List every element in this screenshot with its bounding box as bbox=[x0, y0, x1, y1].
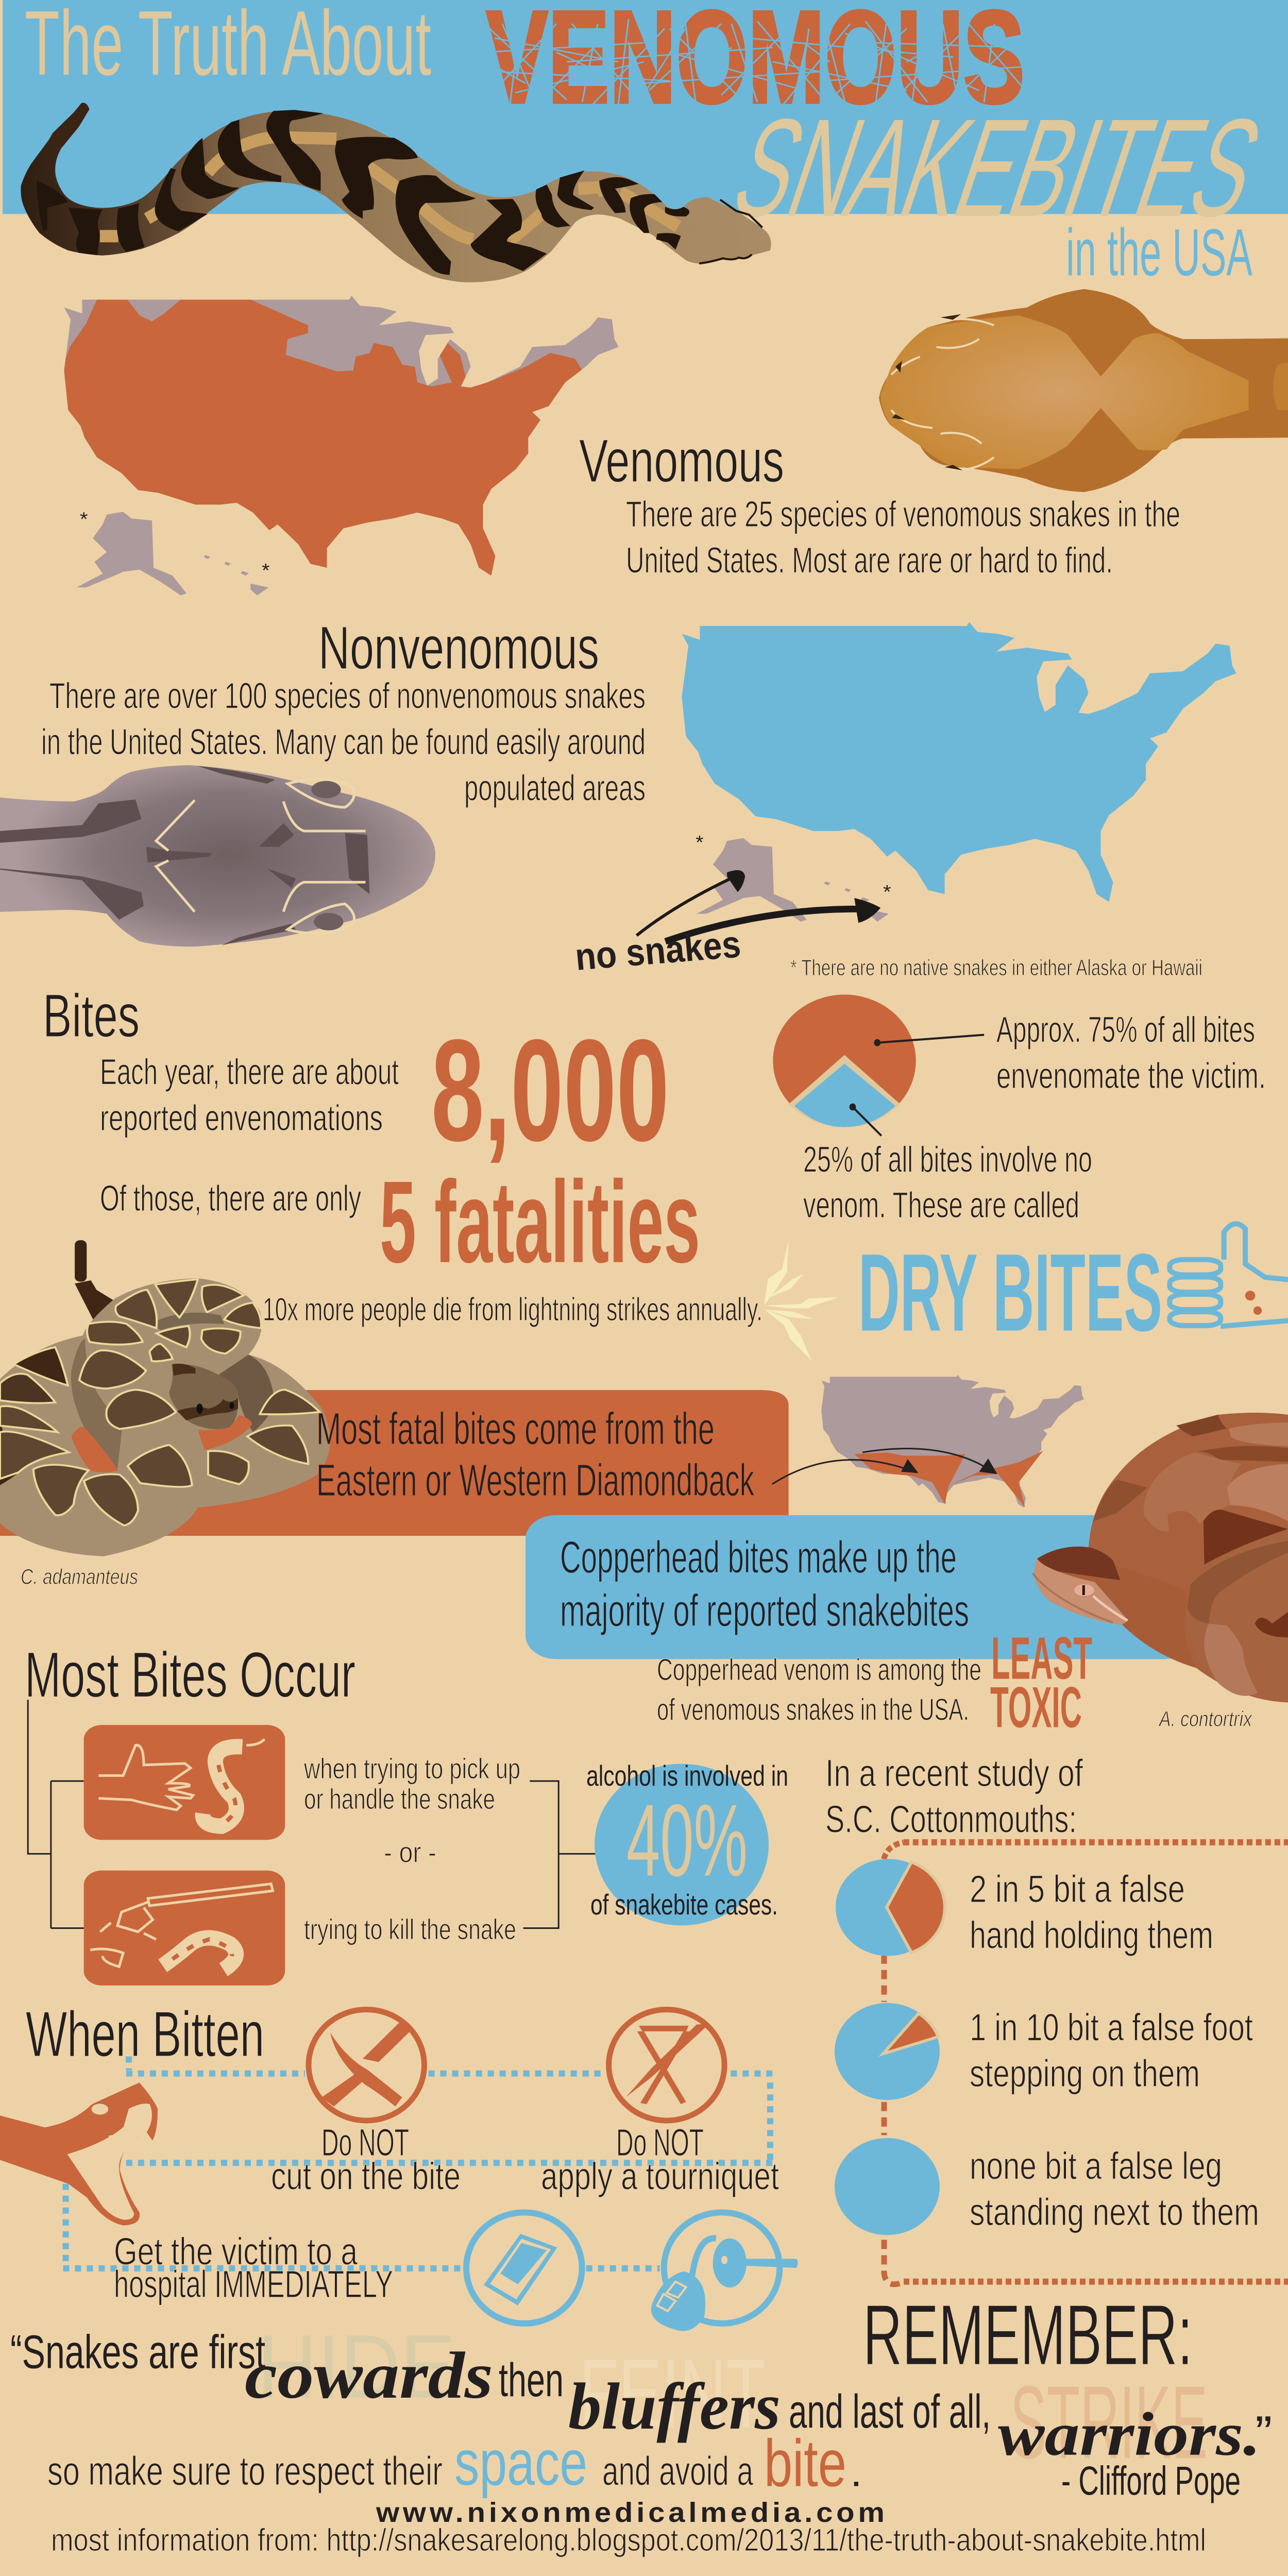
US outline blue bbox=[682, 622, 1236, 902]
icon: lightning bolts bbox=[764, 1241, 839, 1361]
word: LEAST TOXIC bbox=[990, 1624, 1092, 1739]
text: diamondback callout: Eastern or Western Diamondback bbox=[316, 1455, 754, 1505]
text: bite causes: trying to kill the snake bbox=[304, 1914, 516, 1946]
icon: nonvenomous snake head, top view bbox=[0, 765, 435, 946]
Alaska and Hawaii gray bbox=[697, 838, 889, 922]
snake body bbox=[21, 106, 771, 282]
quote: Clifford Pope: “Snakes are first bbox=[10, 2326, 265, 2379]
tan stripes bbox=[100, 137, 678, 241]
top rattlesnake illustration bbox=[21, 103, 771, 282]
text: study results bbox=[970, 1868, 1259, 2233]
asterisks on nonvenomous map bbox=[696, 832, 891, 903]
text: hospital bbox=[114, 2230, 393, 2306]
icon: copperhead snake bbox=[1032, 1413, 1288, 1702]
venomous range orange bbox=[49, 300, 590, 584]
map: diamondback range bbox=[772, 1375, 1084, 1507]
text: diamondback callout bbox=[316, 1404, 754, 1505]
panel: diamondback callout bbox=[0, 1390, 789, 1536]
dotted bracket: cottonmouth section bbox=[884, 1842, 1288, 2284]
icon: do not cut bbox=[309, 2010, 424, 2121]
text: respect space, avoid a bite: . bbox=[850, 2450, 862, 2495]
asterisks on venomous map: * bbox=[262, 560, 270, 581]
quote: Clifford Pope bbox=[10, 2326, 1272, 2503]
pie: none leg bbox=[835, 2138, 940, 2235]
heading: Most Bites Occur: Most Bites Occur bbox=[25, 1638, 355, 1710]
text: bite causes: when trying to pick up bbox=[303, 1753, 520, 1785]
caption: A. contortrix: A. contortrix bbox=[1158, 1707, 1252, 1731]
copperhead body bbox=[1089, 1413, 1288, 1702]
text: pie labels: venom. These are called bbox=[803, 1185, 1079, 1225]
text: hospital: hospital IMMEDIATELY bbox=[114, 2263, 393, 2306]
rattle bbox=[47, 103, 89, 147]
quote: Clifford Pope: and last of all, bbox=[789, 2385, 991, 2438]
heading: Venomous: Venomous bbox=[579, 427, 784, 495]
panel: copperhead callout bbox=[526, 1515, 1195, 1659]
dotted path: when bitten steps bbox=[63, 2056, 773, 2268]
stat: 8,000 envenomations: Each year, there are about bbox=[100, 1052, 399, 1092]
header band bbox=[0, 0, 1288, 214]
text: LEAST bbox=[991, 1624, 1092, 1691]
map: venomous range bbox=[49, 296, 619, 596]
quote: background words bbox=[257, 2316, 1208, 2480]
diamondback range orange and arrows bbox=[772, 1449, 1043, 1507]
icon: thumbs up hand bbox=[1170, 1224, 1288, 1326]
stat: 8,000 envenomations bbox=[100, 1009, 669, 1172]
pie chart: 75% envenomate, 25% dry bbox=[773, 995, 984, 1136]
text: do not cut: cut on the bite bbox=[271, 2155, 461, 2198]
text: study results: 2 in 5 bit a false bbox=[970, 1868, 1185, 1910]
text: nonvenomous description: in the United States. Many can be found easily around bbox=[41, 722, 646, 762]
pie charts: false limb study bbox=[835, 1859, 945, 2235]
text: pie labels: 25% of all bites involve no bbox=[803, 1140, 1092, 1180]
icon: coiled diamondback rattlesnake bbox=[0, 1240, 330, 1556]
asterisks on nonvenomous map: * bbox=[883, 882, 891, 903]
icon: stick and snake panel bbox=[84, 1871, 285, 1986]
icon: phone bbox=[466, 2212, 582, 2324]
rattle and tail bbox=[75, 1240, 114, 1319]
quote: Clifford Pope: ” bbox=[1255, 2406, 1272, 2460]
icon: do not apply tourniquet bbox=[609, 2010, 724, 2121]
stat: 40% alcohol: alcohol is involved in bbox=[586, 1760, 788, 1792]
text: cottonmouth study heading: S.C. Cottonmouths: bbox=[825, 1798, 1077, 1841]
text: respect space, avoid a bite: space bbox=[454, 2427, 587, 2499]
icon: hospital pager and stethoscope bbox=[651, 2212, 798, 2331]
caption: C. adamanteus: C. adamanteus bbox=[21, 1565, 138, 1589]
text: do not cut: Do NOT bbox=[321, 2122, 409, 2164]
title word: VENOMOUS scratched bbox=[484, 0, 1025, 130]
label: no snakes: no snakes bbox=[573, 923, 742, 978]
pie: 2 in 5 hand bbox=[836, 1859, 945, 1956]
icon: hand and snake panel bbox=[84, 1725, 285, 1840]
map: nonvenomous range bbox=[637, 622, 1236, 941]
text: study results: stepping on them bbox=[970, 2053, 1200, 2095]
text: copperhead callout bbox=[560, 1532, 969, 1636]
text: nonvenomous description: There are over 100 species of nonvenomous snakes bbox=[49, 676, 646, 716]
text: do not tourniquet bbox=[541, 2122, 779, 2198]
text: venomous description bbox=[626, 494, 1180, 581]
text: least toxic note: of venomous snakes in the USA. bbox=[657, 1693, 969, 1727]
text: bite causes: or handle the snake bbox=[304, 1784, 495, 1816]
text: respect space, avoid a bite: bite bbox=[764, 2426, 846, 2500]
text: hospital: Get the victim to a bbox=[114, 2230, 358, 2273]
stat: 40% alcohol: 40% bbox=[626, 1783, 748, 1897]
US outline gray bbox=[64, 296, 619, 575]
text: diamondback callout: Most fatal bites come from the bbox=[316, 1404, 715, 1454]
lightning text: 10x more people die from lightning strikes annually. bbox=[263, 1292, 762, 1328]
asterisks on venomous map: * bbox=[80, 509, 88, 530]
text: respect space, avoid a bite: so make sure to respect their bbox=[47, 2449, 443, 2494]
text: copperhead callout: majority of reported snakebites bbox=[560, 1585, 969, 1636]
text: copperhead callout: Copperhead bites make up the bbox=[560, 1532, 957, 1583]
text: nonvenomous description: populated areas bbox=[464, 768, 646, 808]
quote: Clifford Pope: warriors. bbox=[998, 2400, 1261, 2468]
text: do not tourniquet: Do NOT bbox=[616, 2122, 704, 2164]
icon: open-mouth snake bbox=[0, 2082, 158, 2225]
text: bite causes bbox=[303, 1753, 520, 1946]
dark blotches bbox=[37, 110, 689, 275]
word: LEAST TOXIC: TOXIC bbox=[990, 1675, 1082, 1739]
text: nonvenomous description bbox=[41, 676, 646, 808]
stat: 40% alcohol: of snakebite cases. bbox=[590, 1889, 778, 1921]
quote: Clifford Pope: bluffers bbox=[568, 2370, 781, 2444]
arrow: to Hawaii bbox=[665, 898, 880, 941]
stat: 5 fatalities bbox=[100, 1157, 700, 1287]
stat: 40% alcohol bbox=[586, 1760, 788, 1925]
heading: Nonvenomous: Nonvenomous bbox=[318, 614, 599, 682]
text: bite causes: - or - bbox=[384, 1837, 436, 1869]
quote: background words: FEINT bbox=[579, 2338, 766, 2448]
website: www.nixonmedicalmedia.com bbox=[376, 2497, 885, 2528]
text: pie labels bbox=[803, 1010, 1266, 1225]
icon: copperhead head, top view bbox=[879, 289, 1288, 492]
quote: Clifford Pope: then bbox=[499, 2354, 564, 2406]
stat: 5 fatalities: 5 fatalities bbox=[380, 1157, 700, 1287]
small US map gray bbox=[821, 1375, 1084, 1507]
text: respect space, avoid a bite: and avoid a bbox=[602, 2449, 753, 2494]
asterisks on nonvenomous map: * bbox=[696, 832, 704, 853]
coiled body bbox=[0, 1278, 330, 1556]
text: respect space, avoid a bite bbox=[47, 2426, 862, 2500]
connector lines bbox=[28, 1700, 596, 1928]
arrow: to Alaska bbox=[637, 870, 745, 936]
text: least toxic note: Copperhead venom is among the bbox=[657, 1653, 981, 1687]
text: cottonmouth study heading: In a recent study of bbox=[825, 1752, 1083, 1794]
stat: 8,000 envenomations: 8,000 bbox=[431, 1009, 669, 1172]
text: do not tourniquet: apply a tourniquet bbox=[541, 2155, 779, 2198]
copperhead head bbox=[1032, 1547, 1196, 1668]
stat: 5 fatalities: Of those, there are only bbox=[100, 1179, 361, 1218]
title bbox=[25, 0, 1279, 290]
rattlesnake head bbox=[169, 1364, 238, 1429]
pie: 1 in 10 foot bbox=[835, 2003, 940, 2100]
text: do not cut bbox=[271, 2122, 461, 2198]
flow diagram: bite causes bbox=[28, 1700, 596, 1986]
stat: 8,000 envenomations: reported envenomations bbox=[100, 1098, 383, 1138]
quote: background words: HIDE bbox=[257, 2316, 456, 2417]
text: cottonmouth study heading bbox=[825, 1752, 1083, 1841]
heading: Bites: Bites bbox=[43, 982, 140, 1050]
Alaska and Hawaii gray bbox=[76, 512, 268, 596]
quote: Clifford Pope: cowards bbox=[245, 2339, 493, 2413]
asterisks on venomous map bbox=[80, 509, 270, 581]
text: least toxic note bbox=[657, 1653, 981, 1727]
heading: When Bitten: When Bitten bbox=[26, 1998, 264, 2070]
